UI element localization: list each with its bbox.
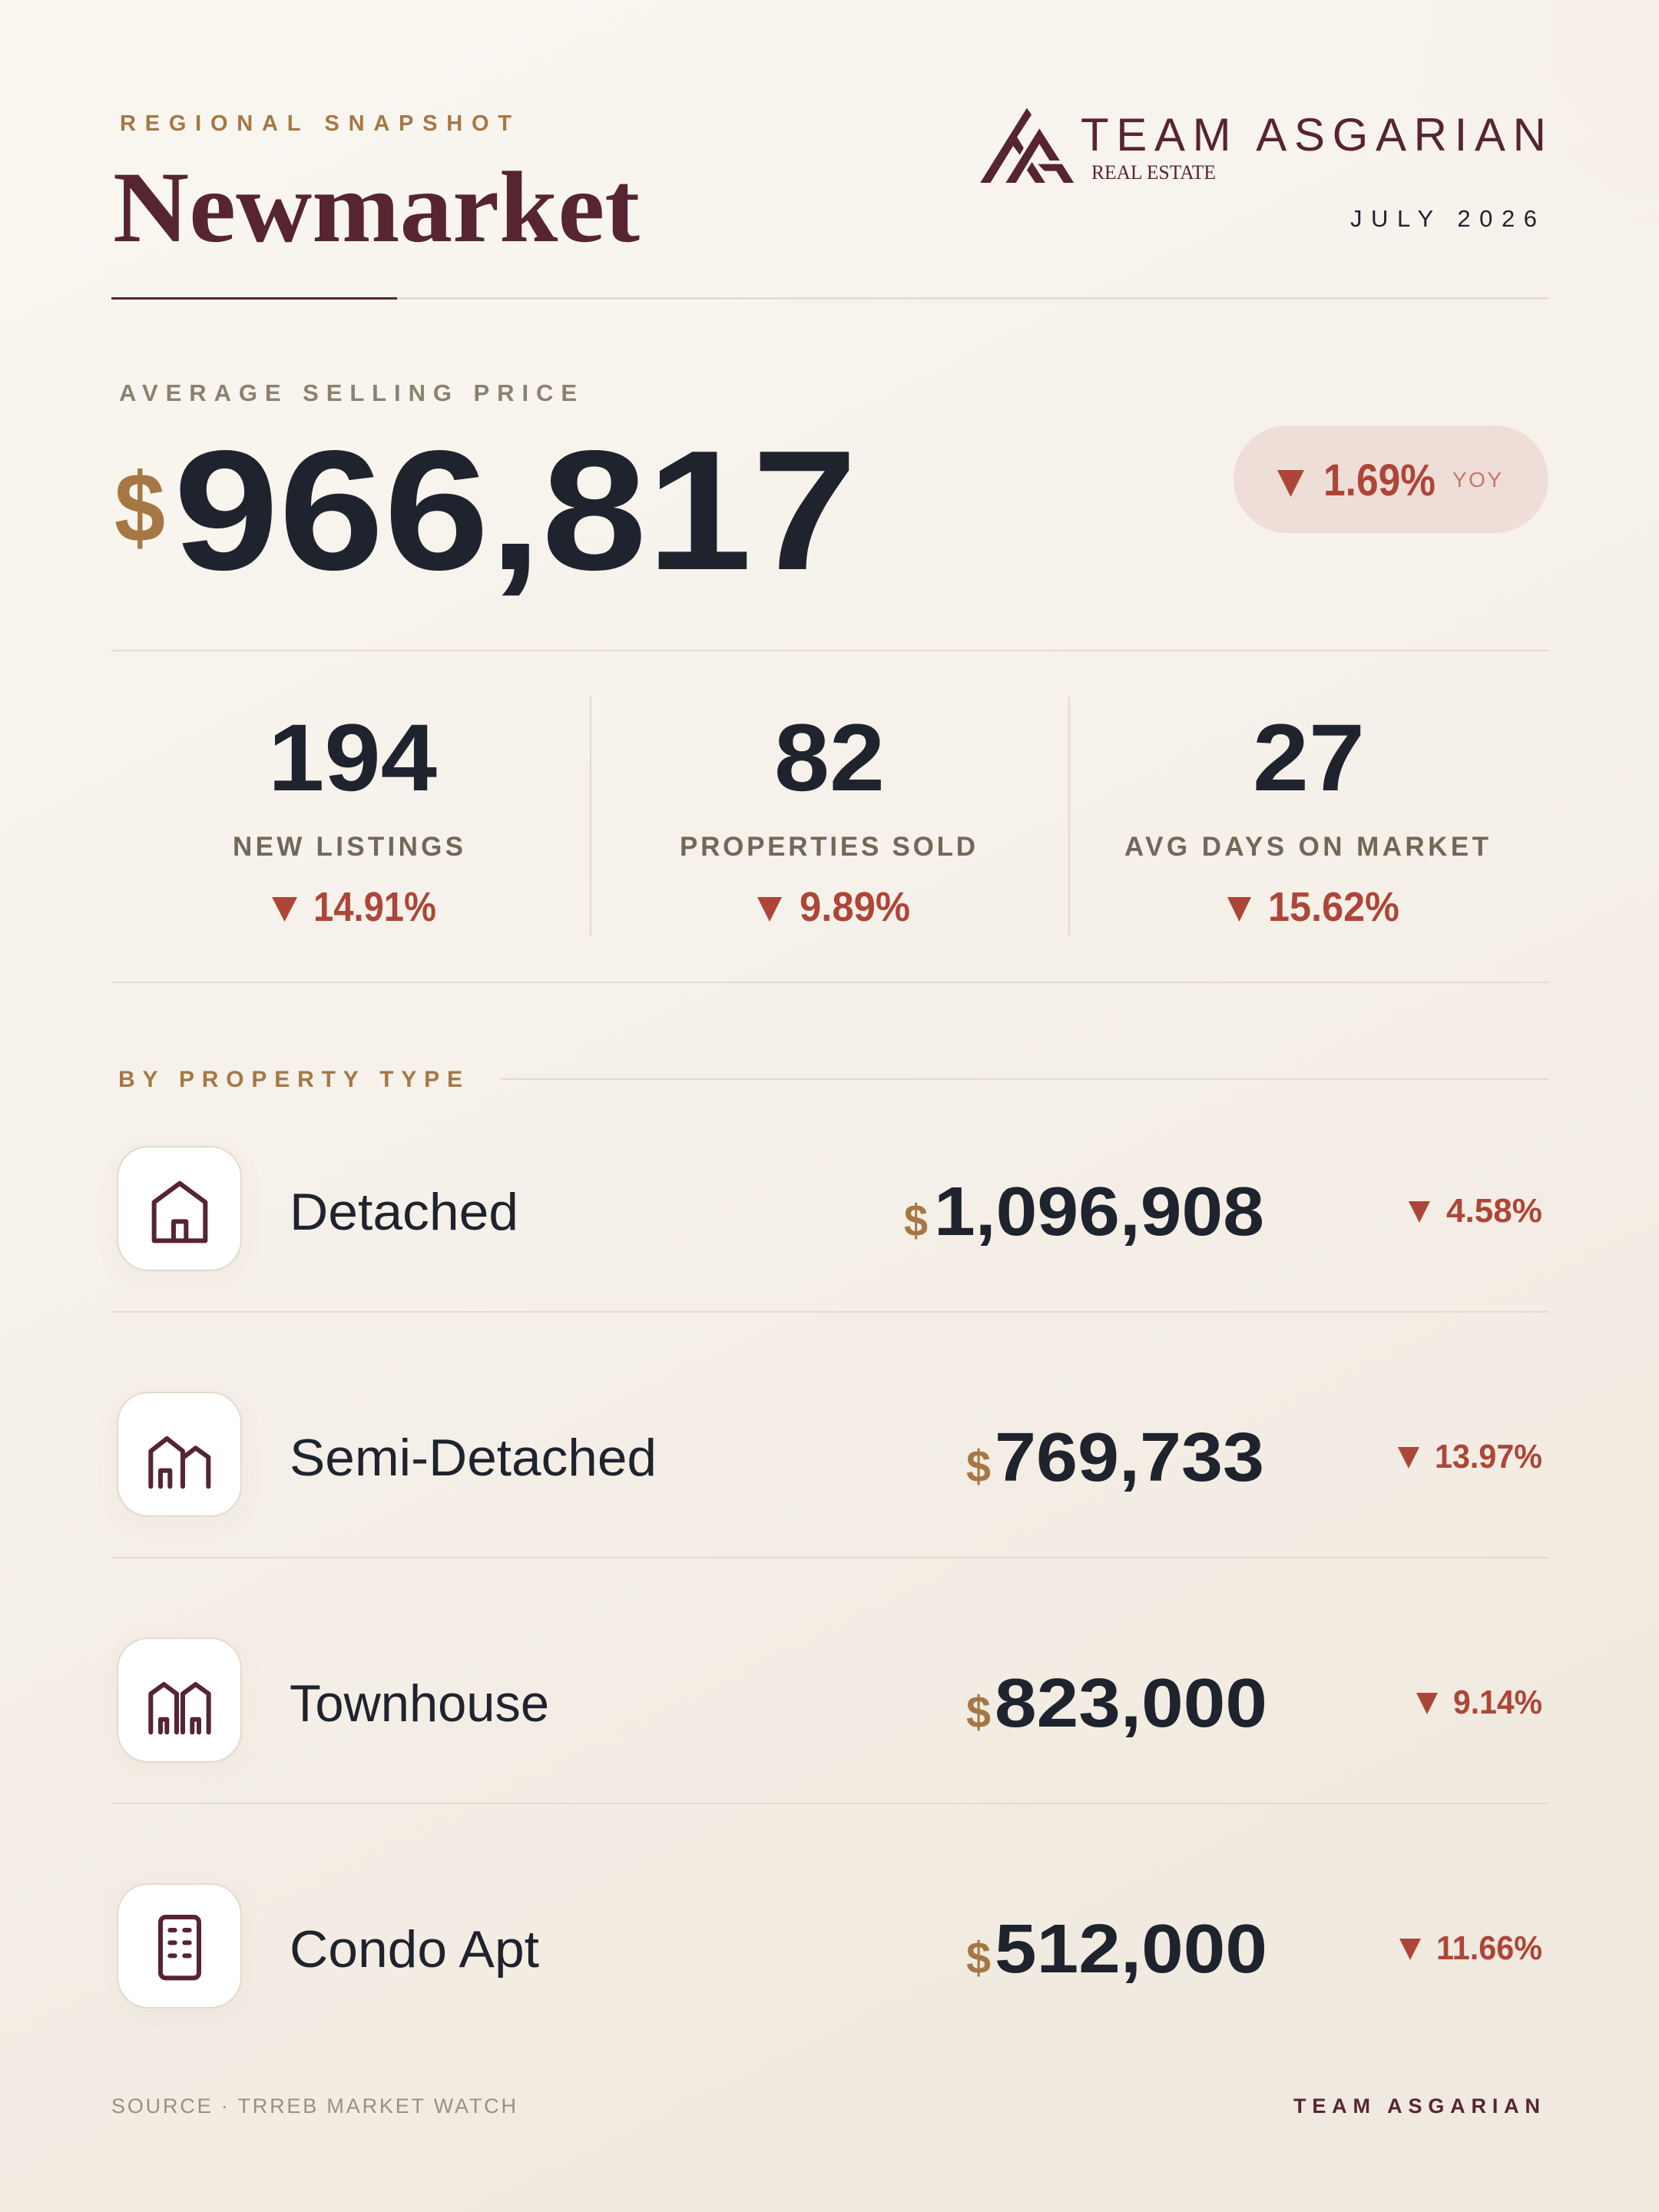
type name: Townhouse [290, 1674, 549, 1733]
icon: logo mark [980, 108, 1074, 183]
header rule [111, 297, 1548, 300]
panel: average selling price [114, 379, 1548, 606]
change pill: 1.69% [1323, 455, 1435, 505]
change: 11.66% [1436, 1929, 1542, 1967]
icon: townhouses [118, 1638, 241, 1762]
header [111, 108, 1548, 300]
footer [111, 2094, 1540, 2118]
change [1416, 1684, 1542, 1721]
icon: down triangle [1277, 470, 1304, 497]
stat: properties sold [680, 705, 975, 930]
logo subtitle: REAL ESTATE [1091, 161, 1216, 184]
stat: properties sold: PROPERTIES SOLD [680, 832, 975, 862]
icon: detached house [118, 1147, 241, 1270]
row: semi-detached [118, 1392, 1542, 1516]
price: $ [966, 1933, 991, 1983]
stat: new listings: NEW LISTINGS [233, 832, 463, 862]
change pill [1233, 426, 1548, 533]
logo: Team Asgarian [980, 108, 1546, 184]
type name: Semi-Detached [290, 1429, 657, 1487]
stat: new listings: 194 [268, 705, 437, 811]
type name: Condo Apt [290, 1920, 539, 1979]
icon: semi-detached houses [118, 1392, 241, 1516]
price value: 966,817 [174, 416, 857, 606]
price: 823,000 [995, 1665, 1267, 1742]
stat: new listings [233, 705, 463, 930]
stat: properties sold: 82 [774, 705, 885, 811]
price: $ [966, 1687, 991, 1737]
stat: avg days on market: 27 [1253, 705, 1365, 811]
row: detached [118, 1147, 1542, 1270]
stat: properties sold: 9.89% [800, 884, 910, 930]
change: 13.97% [1435, 1438, 1542, 1475]
price: 1,096,908 [934, 1174, 1264, 1250]
row: condo apt [118, 1884, 1542, 2008]
section heading: by property type: BY PROPERTY TYPE [118, 1067, 462, 1092]
divider lines [111, 650, 1548, 983]
change pill: YOY [1452, 468, 1502, 492]
change: 4.58% [1446, 1192, 1542, 1230]
price value: $ [114, 453, 165, 563]
source note: SOURCE · TRREB MARKET WATCH [111, 2094, 516, 2118]
title: Newmarket [113, 151, 640, 263]
price: $ [904, 1196, 928, 1246]
eyebrow: regional snapshot: REGIONAL SNAPSHOT [120, 111, 512, 136]
panel: key stats [233, 705, 1488, 930]
stat: new listings: 14.91% [313, 884, 436, 930]
stat: avg days on market: 15.62% [1268, 884, 1399, 930]
change: 9.14% [1453, 1684, 1542, 1721]
type name: Detached [290, 1183, 518, 1241]
date: JULY 2026 [1350, 205, 1537, 232]
price: $ [966, 1442, 991, 1492]
stat: avg days on market [1124, 705, 1488, 930]
footer brand: TEAM ASGARIAN [1293, 2094, 1540, 2118]
logo wordmark: TEAM ASGARIAN [1081, 109, 1546, 161]
stat: avg days on market: AVG DAYS ON MARKET [1124, 832, 1488, 862]
price: 512,000 [995, 1911, 1267, 1988]
price: 769,733 [995, 1419, 1264, 1496]
icon: condo building [118, 1884, 241, 2008]
row: townhouse [118, 1638, 1542, 1762]
label: AVERAGE SELLING PRICE [119, 379, 577, 406]
